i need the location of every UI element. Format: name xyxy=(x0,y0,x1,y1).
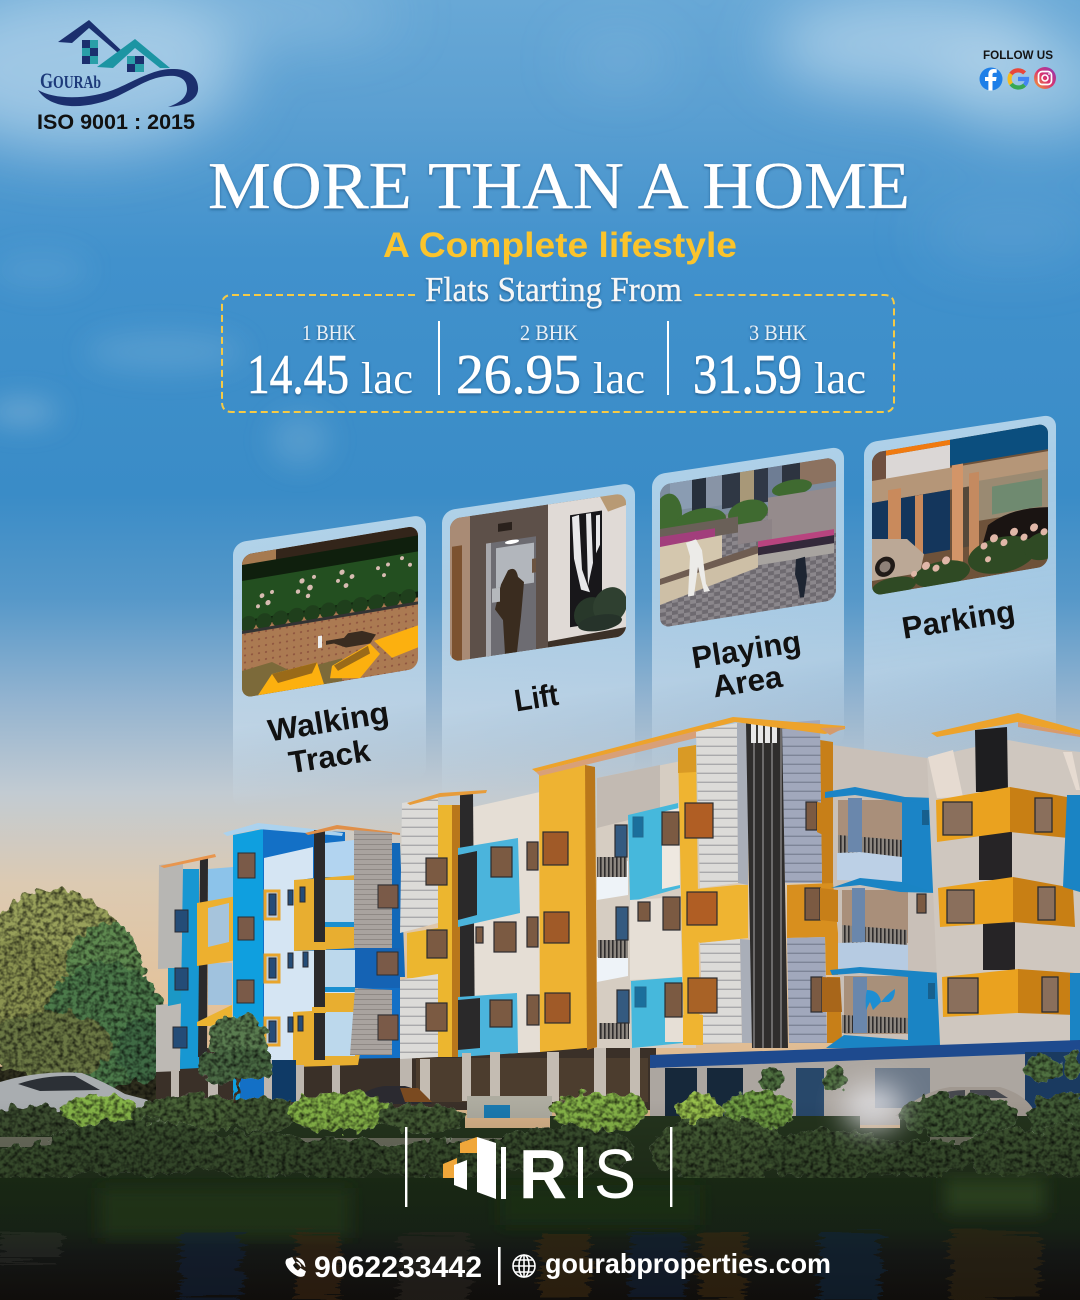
building: central tower xyxy=(532,717,943,1050)
car: right xyxy=(895,1087,1036,1116)
palm trees xyxy=(759,1053,1080,1092)
panel: parking xyxy=(864,416,1056,740)
social: follow us: FOLLOW US xyxy=(983,50,1053,62)
foreground: hedges and bushes xyxy=(0,1084,1080,1183)
project logo: IRIS: R xyxy=(519,1135,567,1213)
price: 3 BHK: 31.59 xyxy=(693,344,802,406)
price: 1 BHK: 14.45 xyxy=(247,344,349,406)
mist glow xyxy=(843,1084,903,1132)
price: 2 BHK: 2 BHK xyxy=(520,320,578,345)
label: parking: Parking xyxy=(899,593,1017,646)
icon: instagram xyxy=(1034,67,1056,89)
price: 3 BHK: 3 BHK xyxy=(749,320,807,345)
panel: walking track xyxy=(233,516,426,774)
icon: building mark xyxy=(443,1137,506,1199)
project logo: IRIS: S xyxy=(594,1135,636,1213)
project logo: IRIS xyxy=(405,1127,672,1213)
price: 1 BHK: lac xyxy=(361,354,413,403)
contact: website: gourabproperties.com xyxy=(545,1248,831,1279)
price: 3 BHK: lac xyxy=(814,354,866,403)
photo: walking track xyxy=(240,525,418,698)
label: walking track xyxy=(265,695,391,780)
panel: playing area xyxy=(652,448,844,740)
price: 1 BHK: 1 BHK xyxy=(302,320,356,345)
label: walking track: Walking xyxy=(265,695,391,748)
icon: globe xyxy=(513,1255,535,1277)
panel: lift xyxy=(442,484,635,762)
social: follow us xyxy=(980,50,1056,90)
photo: parking xyxy=(872,424,1048,594)
trees: left xyxy=(0,890,175,1110)
price: 2 BHK: lac xyxy=(593,354,645,403)
title: MORE THAN A HOME xyxy=(208,149,910,223)
logo: Gourab: GOURAb xyxy=(40,68,101,93)
middle car and wall xyxy=(352,1086,552,1118)
walkway strip xyxy=(0,1137,1050,1147)
price: 1 BHK xyxy=(247,320,413,406)
photo: lift xyxy=(450,493,627,662)
label: lift: Lift xyxy=(512,677,561,718)
building: ground floor xyxy=(650,1040,1080,1125)
icon: facebook xyxy=(980,68,1002,90)
subtitle: A Complete lifestyle xyxy=(383,226,737,265)
under-building shadow xyxy=(156,1048,656,1110)
small tree xyxy=(198,1014,274,1105)
label: playing area: Playing xyxy=(689,624,803,676)
panel: flat prices xyxy=(222,270,894,412)
contact: phone: 9062233442 xyxy=(314,1251,482,1284)
price: 3 BHK xyxy=(693,320,866,406)
label: playing area xyxy=(689,624,803,704)
label: playing area: Area xyxy=(710,659,785,704)
building: right wing xyxy=(927,713,1080,1050)
price: 2 BHK: 26.95 xyxy=(456,344,581,406)
prices heading: Flats Starting From xyxy=(425,270,682,309)
icon: phone xyxy=(286,1258,306,1276)
logo: Gourab: ISO 9001 : 2015 xyxy=(37,111,195,134)
logo: Gourab xyxy=(37,20,198,134)
label: walking track: Track xyxy=(286,733,373,780)
car: left xyxy=(0,1072,148,1112)
photo: playing area xyxy=(654,457,836,629)
building: middle block xyxy=(400,758,696,1102)
building: left blue block xyxy=(156,823,412,1105)
icon: google xyxy=(1010,70,1027,88)
price: 2 BHK xyxy=(456,320,645,406)
water and reflections xyxy=(0,1100,1080,1300)
